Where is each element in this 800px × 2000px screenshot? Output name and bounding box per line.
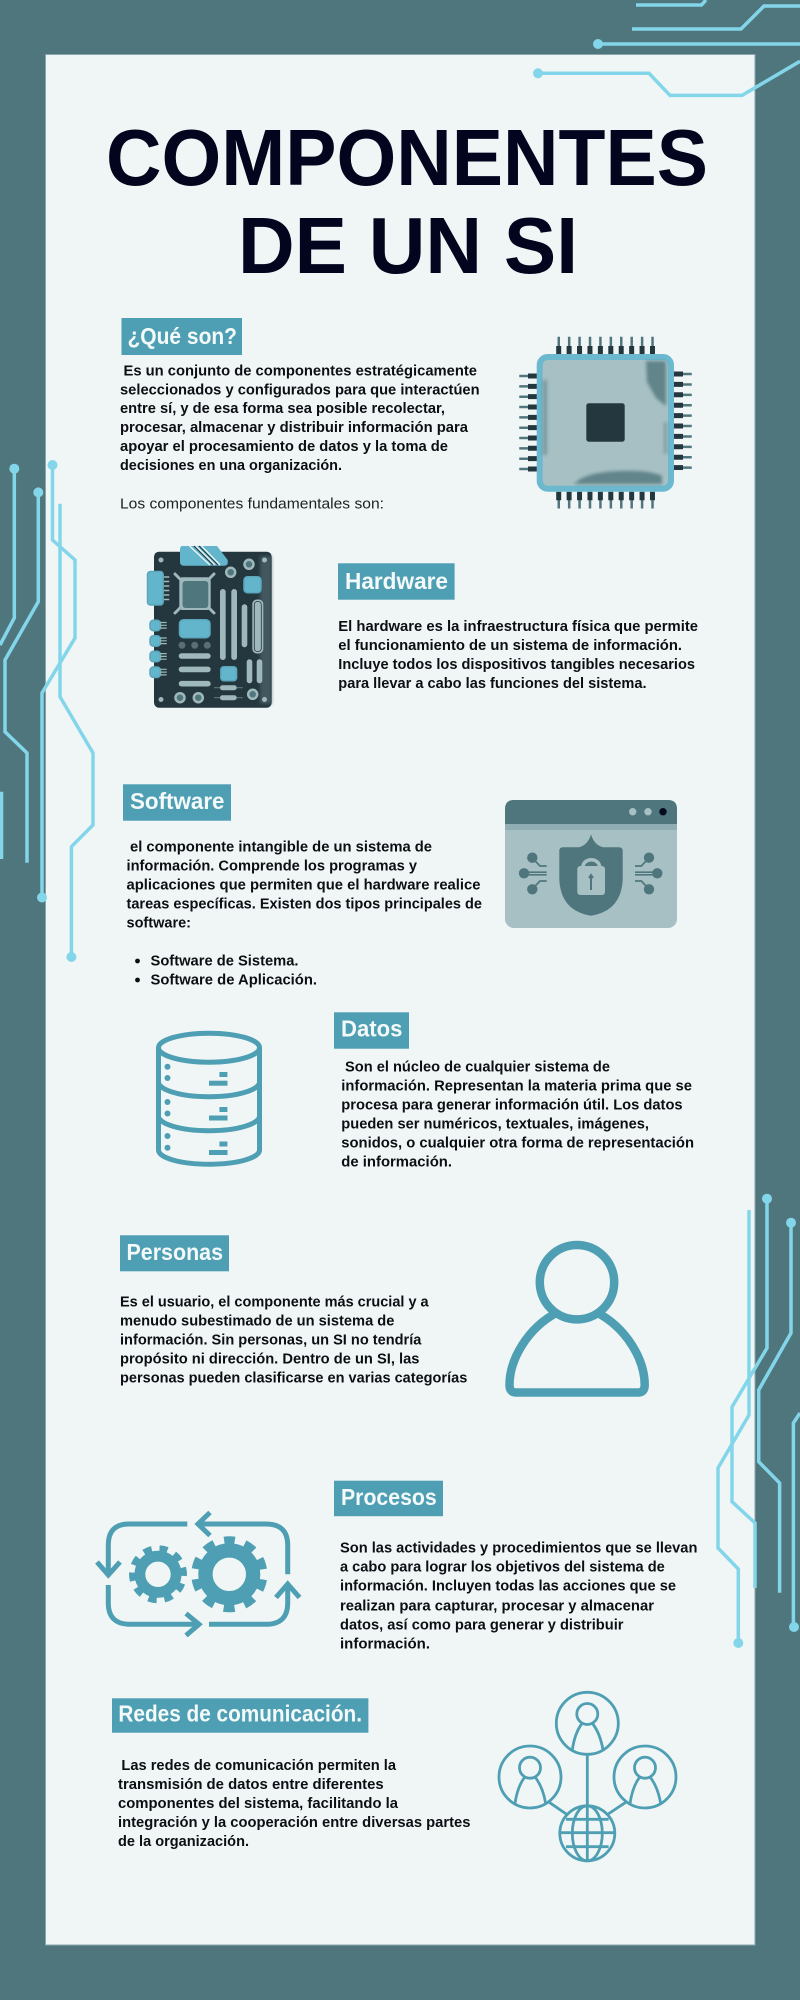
- icon: communication network: [499, 1692, 676, 1861]
- text block: datos: información. Representan la materia prima que se: [341, 1079, 692, 1095]
- text block: datos: pueden ser numéricos, textuales, imágenes,: [341, 1117, 649, 1133]
- icon: security browser window: [505, 800, 677, 928]
- text block: datos: Son el núcleo de cualquier sistema de: [345, 1060, 610, 1076]
- text block: software: el componente intangible de un sistema de: [130, 840, 432, 856]
- text block: datos: procesa para generar información útil. Los datos: [341, 1098, 683, 1114]
- heading: Personas: Personas: [126, 1239, 223, 1265]
- text block: hardware: Incluye todos los dispositivos tangibles necesarios: [338, 657, 695, 673]
- text block: procesos: a cabo para lograr los objetivos del sistema de: [340, 1560, 665, 1576]
- title: [106, 113, 708, 290]
- text block: definition: apoyar el procesamiento de datos y la toma de: [120, 439, 448, 455]
- text block: redes: Las redes de comunicación permiten la: [121, 1758, 397, 1774]
- icon: database: [158, 1033, 260, 1164]
- text block: procesos: información.: [340, 1637, 430, 1653]
- text block: redes: integración y la cooperación entre diversas partes: [118, 1815, 470, 1831]
- list: software types: Software de Sistema.: [150, 954, 298, 970]
- text block: hardware: el funcionamiento de un sistema de información.: [338, 638, 682, 654]
- text block: intro to components: Los componentes fundamentales son:: [120, 497, 384, 513]
- text block: definition: entre sí, y de esa forma sea posible recolectar,: [120, 401, 445, 417]
- text block: redes: [118, 1758, 470, 1850]
- text block: personas: [120, 1295, 467, 1387]
- heatsink: [180, 546, 228, 566]
- text block: personas: menudo subestimado de un sistema de: [120, 1314, 394, 1330]
- text block: personas: Es el usuario, el componente más crucial y a: [120, 1295, 430, 1311]
- text block: procesos: información. Incluyen todas las acciones que se: [340, 1579, 676, 1595]
- heading: Personas: [120, 1235, 229, 1271]
- text block: procesos: realizan para capturar, procesar y almacenar: [340, 1599, 654, 1615]
- heading: Procesos: [334, 1481, 443, 1516]
- heading: Datos: Datos: [341, 1016, 402, 1042]
- text block: hardware: El hardware es la infraestructura física que permite: [338, 619, 698, 635]
- heading: Hardware: [338, 563, 455, 600]
- heading: Hardware: Hardware: [345, 568, 448, 594]
- icon: motherboard: [148, 546, 272, 708]
- text block: redes: componentes del sistema, facilitando la: [118, 1796, 399, 1812]
- icon: gears with cycle arrows: [97, 1512, 300, 1636]
- heading: ¿Qué son?: [122, 318, 242, 355]
- list: software types: Software de Aplicación.: [150, 973, 317, 989]
- text block: definition: procesar, almacenar y distribuir información para: [120, 420, 469, 436]
- text block: definition: decisiones en una organización.: [120, 458, 342, 474]
- heading: Datos: [334, 1012, 409, 1049]
- text block: procesos: [340, 1541, 697, 1653]
- text block: hardware: [338, 619, 698, 692]
- text block: procesos: Son las actividades y procedimientos que se llevan: [340, 1541, 697, 1557]
- text block: definition: Es un conjunto de componentes estratégicamente: [124, 363, 477, 379]
- list: software types: [135, 954, 317, 989]
- text block: personas: personas pueden clasificarse en varias categorías: [120, 1371, 467, 1387]
- text block: software: tareas específicas. Existen dos tipos principales de: [126, 897, 482, 913]
- icon: person: [510, 1245, 645, 1392]
- title: DE UN SI: [238, 201, 578, 290]
- text block: software: software:: [126, 916, 191, 932]
- text block: software: [126, 840, 482, 932]
- text block: software: aplicaciones que permiten que el hardware realice: [126, 878, 480, 894]
- heading: ¿Qué son?: ¿Qué son?: [128, 323, 237, 349]
- text block: datos: sonidos, o cualquier otra forma de representación: [341, 1136, 694, 1152]
- text block: personas: propósito ni dirección. Dentro de un SI, las: [120, 1352, 419, 1368]
- title: COMPONENTES: [106, 113, 708, 202]
- icon: processor chip: [528, 344, 683, 500]
- heading: Procesos: Procesos: [341, 1484, 437, 1510]
- text block: datos: [341, 1060, 694, 1171]
- circuit lines: right: [718, 1194, 800, 1648]
- text block: software: información. Comprende los programas y: [126, 859, 417, 875]
- heading: Software: [123, 784, 231, 821]
- heading: Software: Software: [130, 788, 224, 814]
- text block: redes: transmisión de datos entre diferentes: [118, 1777, 384, 1793]
- text block: datos: de información.: [341, 1155, 452, 1171]
- circuit lines: top right: [533, 0, 800, 95]
- circuit lines: left: [0, 460, 93, 962]
- text block: procesos: datos, así como para generar y distribuir: [340, 1618, 624, 1634]
- text block: definition: [120, 363, 480, 474]
- text block: personas: información. Sin personas, un SI no tendría: [120, 1333, 422, 1349]
- text block: redes: de la organización.: [118, 1834, 249, 1850]
- text block: definition: seleccionados y configurados para que interactúen: [120, 382, 480, 398]
- text block: hardware: para llevar a cabo las funciones del sistema.: [338, 676, 646, 692]
- heading: Redes de comunicación: [112, 1698, 368, 1733]
- heading: Redes de comunicación: Redes de comunicación.: [118, 1701, 362, 1727]
